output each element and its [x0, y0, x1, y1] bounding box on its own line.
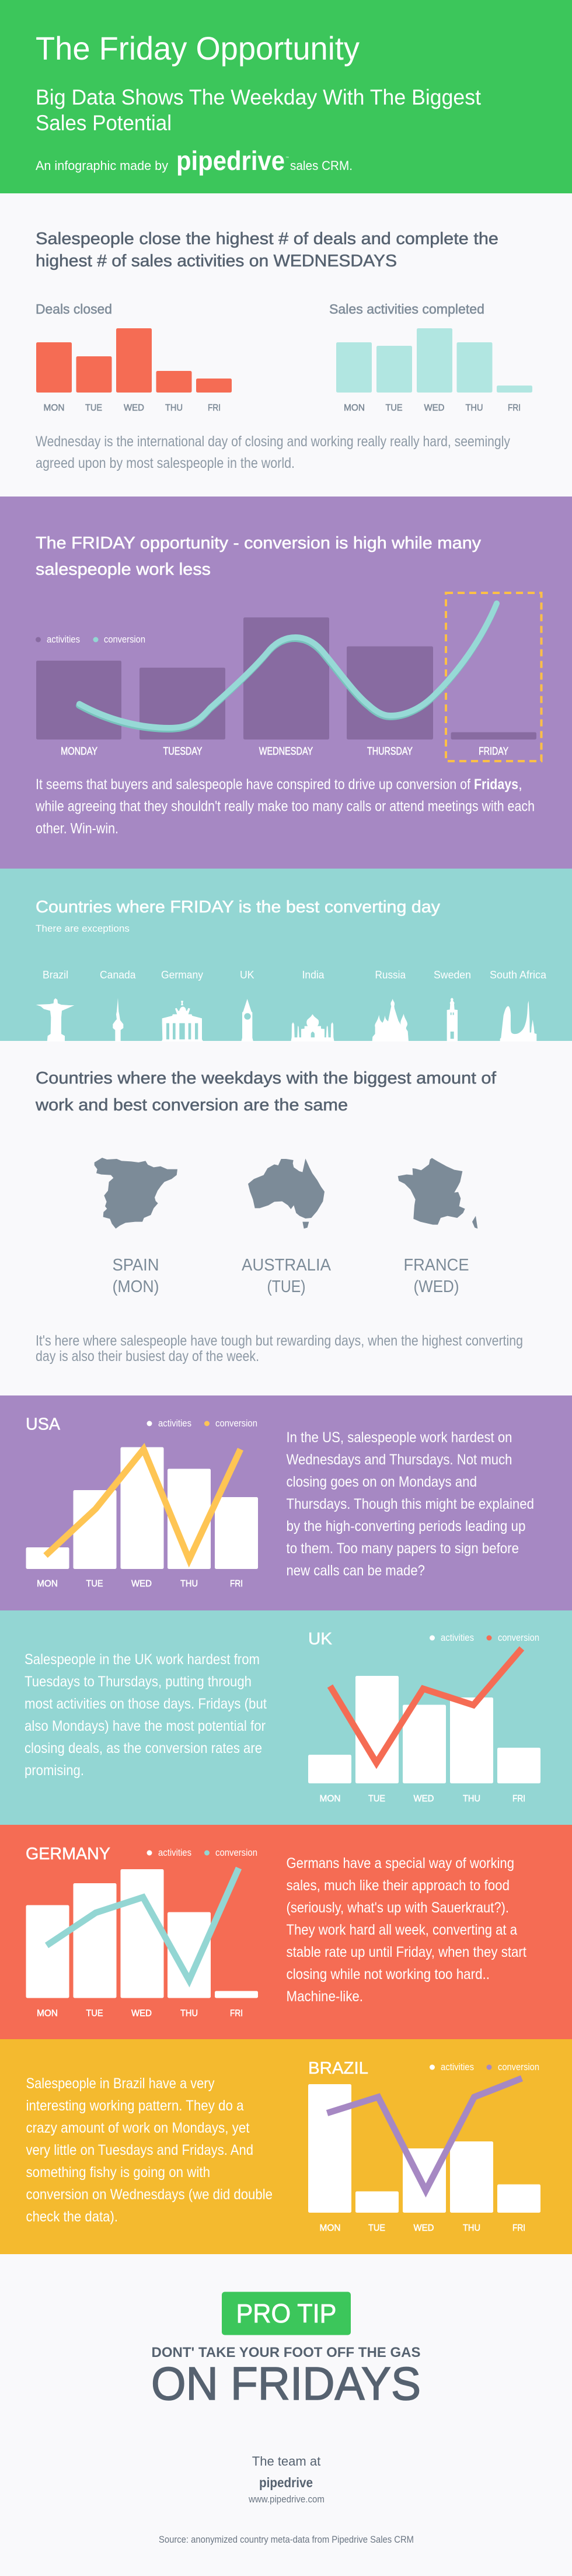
pro tip badge: PRO TIP [236, 2299, 336, 2328]
heading: work and best conversion are the same [35, 1096, 348, 1115]
bar chart: sales activities completed: Sales activities completed [329, 301, 484, 317]
country labels: (WED) [413, 1277, 459, 1296]
bar chart: sales activities completed [329, 301, 532, 413]
bar chart: weekly activities: MONDAY [61, 745, 97, 757]
chart: THU [180, 2008, 198, 2019]
icon: stockholm city hall tower [447, 998, 458, 1041]
paragraph: Salespeople in the UK work hardest from [25, 1651, 260, 1668]
country labels: Russia [375, 969, 406, 981]
pro tip badge [222, 2292, 351, 2335]
chart [308, 1648, 540, 1804]
chart: TUE [368, 2223, 385, 2233]
chart: WED [413, 1794, 434, 1804]
team signature: www.pipedrive.com [248, 2494, 325, 2505]
panel: usa [0, 1395, 572, 1610]
paragraph: interesting working pattern. They do a [26, 2098, 244, 2114]
panel: friday countries [0, 869, 572, 1041]
country labels: South Africa [490, 969, 547, 981]
panel: germany [0, 1825, 572, 2039]
subtitle [36, 85, 482, 135]
panel: same weekdays countries [35, 1069, 523, 1365]
country labels [43, 969, 547, 981]
paragraph [36, 433, 510, 471]
landmarks: india, russia, sweden, south africa [291, 998, 536, 1041]
country name: GERMANY [26, 1845, 110, 1863]
map: australia [248, 1158, 325, 1228]
paragraph: conversion on Wednesdays (we did double [26, 2186, 273, 2203]
legend: activities [47, 634, 80, 645]
legend: conversion [104, 634, 145, 645]
paragraph: most activities on those days. Fridays (but [25, 1696, 267, 1712]
bar chart: deals closed: FRI [208, 403, 221, 413]
heading: Countries where the weekdays with the biggest amount of [36, 1069, 497, 1088]
icon: taj mahal [291, 1015, 334, 1041]
paragraph: promising. [25, 1762, 84, 1779]
country labels: UK [240, 969, 254, 981]
chart: THU [180, 1579, 198, 1589]
country labels [112, 1256, 469, 1296]
heading [36, 534, 482, 579]
tip headline: ON FRIDAYS [151, 2358, 421, 2410]
paragraph: new calls can be made? [286, 1563, 425, 1579]
chart: TUE [86, 1579, 103, 1589]
byline with pipedrive logo: pipedrive [176, 145, 285, 176]
paragraph: to them. Too many papers to sign before [286, 1540, 519, 1557]
heading: The FRIDAY opportunity - conversion is high while many [36, 534, 482, 553]
heading: highest # of sales activities on WEDNESDAYS [36, 252, 397, 270]
country labels: (MON) [112, 1277, 159, 1296]
bar chart: weekly activities [36, 617, 536, 757]
paragraph: They work hard all week, converting at a [286, 1922, 517, 1938]
paragraph: Fridays [474, 776, 518, 793]
paragraph: sales, much like their approach to food [286, 1877, 510, 1894]
chart: MON [320, 1794, 341, 1804]
heading [35, 1069, 497, 1115]
chart: MON [320, 2223, 341, 2233]
heading: salespeople work less [36, 560, 211, 579]
byline with pipedrive logo: An infographic made by [36, 158, 168, 173]
paragraph: closing while not working too hard.. [286, 1966, 490, 1983]
bar chart: deals closed: Deals closed [36, 301, 112, 317]
paragraph: Germans have a special way of working [286, 1855, 514, 1872]
paragraph: closing goes on on Mondays and [286, 1474, 477, 1490]
chart: FRI [512, 2223, 525, 2233]
paragraph: In the US, salespeople work hardest on [286, 1429, 512, 1446]
chart: MON [37, 2008, 58, 2019]
paragraph [25, 1651, 267, 1779]
country name: BRAZIL [308, 2059, 368, 2078]
panel: friday opportunity [0, 497, 572, 869]
chart: WED [131, 2008, 152, 2019]
team signature: pipedrive [259, 2475, 313, 2490]
byline with pipedrive logo [36, 145, 353, 176]
chart: THU [463, 1794, 480, 1804]
legend: conversion [498, 2061, 539, 2072]
paragraph: other. Win-win. [36, 820, 118, 836]
legend: activities [441, 1632, 474, 1643]
heading: Salespeople close the highest # of deals and complete the [36, 230, 498, 248]
country name: USA [26, 1415, 61, 1433]
chart: MON [37, 1579, 58, 1589]
icon: cn tower [113, 998, 123, 1041]
legend: activities [158, 1418, 191, 1429]
chart: TUE [368, 1794, 385, 1804]
chart: WED [131, 1579, 152, 1589]
icon: saint basil's cathedral [372, 999, 409, 1041]
bar chart: deals closed: TUE [85, 403, 102, 413]
chart: WED [413, 2223, 434, 2233]
panel: uk [0, 1610, 572, 1825]
landmarks: brazil, canada, germany, uk [36, 998, 253, 1041]
subtitle: Big Data Shows The Weekday With The Biggest [36, 85, 482, 109]
chart: FRI [512, 1794, 525, 1804]
bar chart: weekly activities: THURSDAY [367, 745, 413, 757]
byline with pipedrive logo: ™ [285, 156, 289, 160]
country labels: SPAIN [112, 1256, 159, 1275]
paragraph [35, 776, 535, 836]
paragraph: Thursdays. Though this might be explained [286, 1496, 534, 1512]
panel: pro tip and footer [151, 2292, 421, 2545]
bar chart: deals closed: THU [165, 403, 183, 413]
heading [36, 230, 498, 270]
legend: conversion [215, 1418, 257, 1429]
map: spain [95, 1158, 177, 1228]
paragraph [36, 1333, 523, 1365]
icon: christ the redeemer [36, 998, 74, 1041]
chart [308, 2078, 540, 2233]
paragraph [286, 1429, 534, 1579]
byline with pipedrive logo: sales CRM. [290, 158, 353, 173]
title: The Friday Opportunity [36, 30, 360, 67]
legend: conversion [215, 1847, 257, 1858]
tip line: DONT' TAKE YOUR FOOT OFF THE GAS [152, 2345, 420, 2360]
paragraph: crazy amount of work on Mondays, yet [26, 2120, 250, 2136]
subheading: There are exceptions [36, 923, 130, 934]
legend: conversion [498, 1632, 539, 1643]
paragraph: stable rate up until Friday, when they start [286, 1944, 526, 1960]
paragraph: check the data). [26, 2209, 118, 2225]
panel: brazil [0, 2039, 572, 2254]
bar chart: deals closed [36, 301, 232, 413]
country name: UK [308, 1630, 333, 1648]
chart: FRI [230, 2008, 243, 2019]
chart [26, 1447, 258, 1589]
bar chart: sales activities completed: WED [424, 403, 445, 413]
bar chart: sales activities completed: THU [466, 403, 483, 413]
conversion curve [79, 603, 497, 730]
subtitle: Sales Potential [36, 111, 172, 135]
bar chart: deals closed: MON [43, 403, 64, 413]
country labels: Brazil [43, 969, 68, 981]
country labels: AUSTRALIA [242, 1256, 332, 1275]
paragraph: also Mondays) have the most potential for [25, 1718, 266, 1734]
legend [147, 1847, 257, 1858]
chart: FRI [230, 1579, 243, 1589]
country labels: Canada [100, 969, 136, 981]
country labels: (TUE) [267, 1277, 306, 1296]
paragraph: Wednesdays and Thursdays. Not much [286, 1452, 512, 1468]
bar chart: weekly activities: WEDNESDAY [259, 745, 313, 757]
paragraph: day is also their busiest day of the week. [36, 1348, 259, 1365]
panel: header [0, 0, 572, 193]
legend: activities [158, 1847, 191, 1858]
paragraph: (seriously, what's up with Sauerkraut?). [286, 1900, 509, 1916]
paragraph: , [518, 776, 522, 793]
legend [430, 1632, 539, 1643]
icon: moses mabhida stadium [500, 1001, 536, 1041]
paragraph: very little on Tuesdays and Fridays. And [26, 2142, 253, 2158]
legend: activities [441, 2061, 474, 2072]
friday highlight dashed box [446, 593, 542, 761]
country labels: Germany [161, 969, 203, 981]
bar chart: sales activities completed: MON [344, 403, 365, 413]
paragraph: agreed upon by most salespeople in the world. [36, 455, 295, 471]
paragraph: Machine-like. [286, 1988, 363, 2005]
bar chart: weekly activities: FRIDAY [479, 745, 508, 757]
paragraph: something fishy is going on with [26, 2164, 210, 2181]
legend [430, 2061, 539, 2072]
paragraph: Salespeople in Brazil have a very [26, 2075, 215, 2092]
bar chart: deals closed: WED [124, 403, 144, 413]
country labels: India [302, 969, 325, 981]
map: france [398, 1158, 477, 1228]
legend [147, 1418, 257, 1429]
paragraph: by the high-converting periods leading up [286, 1518, 525, 1535]
paragraph: closing deals, as the conversion rates are [25, 1740, 262, 1756]
country labels: FRANCE [404, 1256, 469, 1275]
chart: TUE [86, 2008, 103, 2019]
icon: big ben [241, 999, 253, 1041]
heading: Countries where FRIDAY is the best converting day [36, 898, 441, 916]
panel: wednesdays [36, 230, 532, 471]
country labels: Sweden [434, 969, 471, 981]
source note: Source: anonymized country meta-data from Pipedrive Sales CRM [159, 2534, 414, 2545]
paragraph [286, 1855, 526, 2005]
bar chart: weekly activities: TUESDAY [163, 745, 202, 757]
team signature: The team at [252, 2454, 320, 2469]
paragraph: Tuesdays to Thursdays, putting through [25, 1674, 252, 1690]
chart: THU [463, 2223, 480, 2233]
legend [36, 634, 145, 645]
bar chart: sales activities completed: FRI [508, 403, 521, 413]
bar chart: sales activities completed: TUE [385, 403, 403, 413]
team signature [248, 2454, 325, 2505]
paragraph: It seems that buyers and salespeople have conspired to drive up conversion of [36, 776, 470, 793]
icon: brandenburg gate [162, 1001, 203, 1041]
chart [26, 1868, 258, 2019]
paragraph [26, 2075, 273, 2225]
